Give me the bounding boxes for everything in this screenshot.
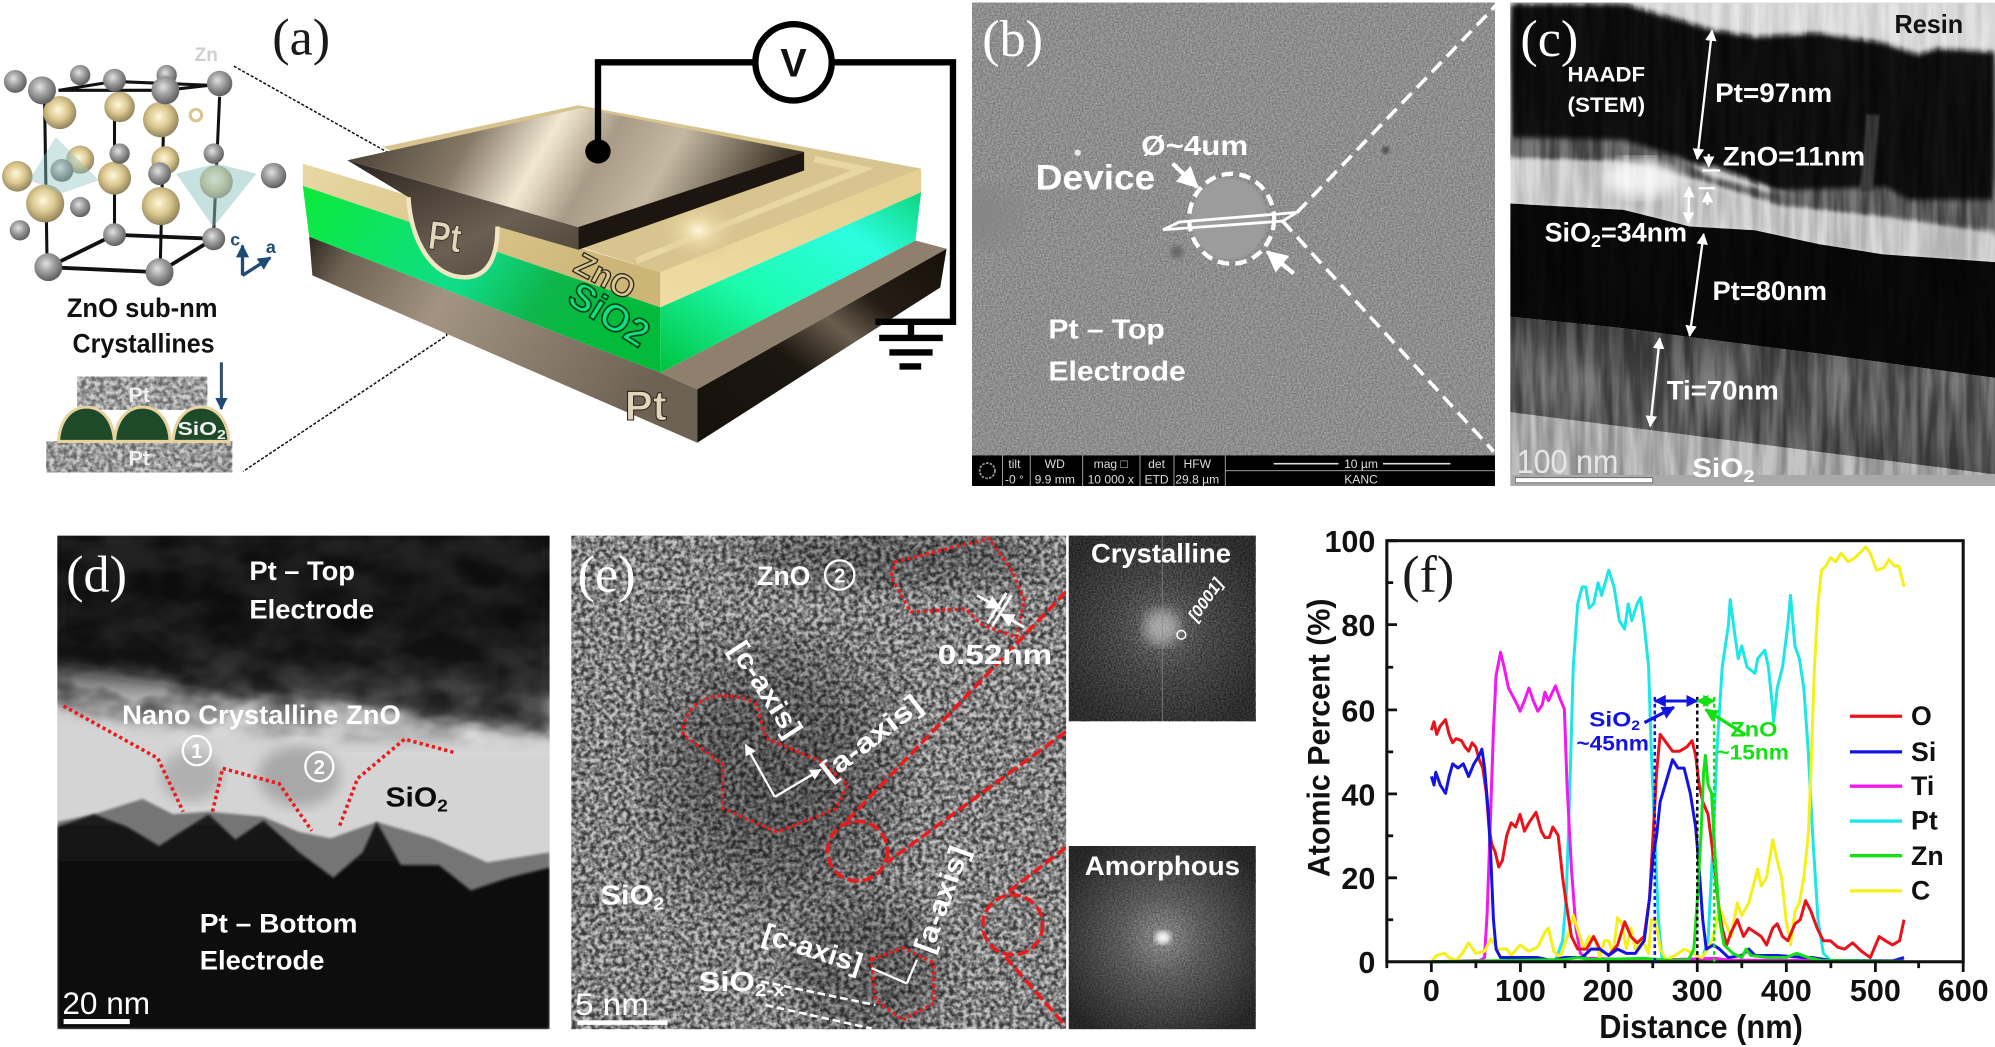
label Pt on bottom layer: Pt [625,382,667,429]
ZnO crystal structure [2,45,286,286]
SiO2 label: SiO [601,880,649,911]
caption: ZnO sub-nm Crystallines: ZnO sub-nm [67,293,218,323]
chart legend [1850,701,1944,905]
gray crystal mounds [57,799,550,1029]
thickness labels: 2 [1743,466,1755,486]
scale bar 5 nm: 5 nm [575,986,649,1022]
Pt top electrode label: Pt – Top [249,556,355,586]
chart legend: Si [1911,737,1936,767]
thickness arrows [1650,31,1720,426]
ZnO thickness annotation [1716,717,1789,764]
x axis tick labels: 200 [1583,974,1634,1008]
y axis tick labels: 100 [1324,525,1375,559]
caption: ZnO sub-nm Crystallines: Crystallines [73,328,215,358]
panel label (c): (c) [1520,11,1578,68]
SEM info bar: WD [1045,457,1065,471]
SEM info bar: -0 ° [1005,472,1024,486]
scale bar 100 nm [1515,450,1654,484]
Pt top electrode label: Pt – Top [1048,313,1165,344]
region markers 1 and 2: 2 [314,757,325,779]
crystalline grain outlines [683,538,1024,1020]
lattice spacing marker and label: 0.52nm [938,639,1052,670]
SiO2-x dashed band [762,981,875,1029]
thickness labels [1545,78,1865,486]
SEM info bar: KANC [1344,472,1378,486]
series Zn [1431,755,1904,962]
data lines [1431,547,1904,962]
thickness labels: Pt=97nm [1715,78,1832,108]
series O [1431,720,1904,958]
y axis tick labels: 20 [1341,862,1375,896]
x axis tick labels [1423,974,1989,1008]
x axis tick labels: 100 [1495,974,1546,1008]
series Pt [1431,570,1904,962]
panel label (d): (d) [66,547,127,604]
panel: (b) SEM image [942,3,1496,486]
ZnO thickness annotation: ZnO [1730,717,1777,742]
y axis tick labels [1324,525,1375,980]
SEM info bar: 10 µm [1344,457,1378,471]
x axis tick labels: 400 [1761,974,1812,1008]
HAADF STEM label [1568,67,1644,116]
panel: FFT amorphous [1069,846,1256,1029]
bottom Pt dark mass [57,814,550,1029]
Pt top electrode label [1050,320,1185,381]
panel: (d) TEM nano crystalline ZnO [57,536,550,1030]
axis labels [724,635,975,979]
thickness labels: SiO [1692,453,1738,483]
top Pt layer [1510,4,1995,235]
SiO2 thickness annotation: ~45nm [1576,731,1649,756]
x axis tick labels: 300 [1672,974,1723,1008]
y axis tick labels: 40 [1341,778,1375,812]
y axis tick labels: 0 [1358,946,1375,980]
ZnO 2 label: ZnO [757,561,810,591]
Resin label: Resin [1894,11,1963,39]
Pt top electrode label [251,562,374,619]
SiO2 light band [1510,159,1995,262]
ZnO 2 label: 2 [834,566,845,588]
SiO2-x label: SiO [699,966,747,997]
ZnO crystal structure: a [266,237,277,257]
panel label (e): (e) [578,547,636,604]
selection circles and guide lines [828,592,1066,1027]
Pt top electrode label: Electrode [1048,355,1186,386]
top electrode and transition gradient [57,536,550,752]
chart legend: C [1911,875,1930,905]
series C [1431,547,1904,962]
panel label (a): (a) [272,10,330,67]
axis labels: [a-axis] [908,842,975,957]
SiO2 label: 2 [437,796,448,816]
chart legend: Pt [1911,805,1938,835]
device dashed outline [1163,174,1297,264]
diameter label: Ø~4um [1141,130,1248,161]
top Pt electrode [347,108,804,277]
label SiO2: SiO2 [561,273,657,356]
y axis title: Atomic Percent (%) [1301,599,1337,877]
series Ti [1431,652,1904,962]
Ti layer [1510,317,1995,475]
axis labels: [c-axis] [724,635,809,743]
thickness labels: Ti=70nm [1667,375,1779,405]
HAADF STEM label: HAADF [1568,61,1645,86]
SEM info bar: 10 000 x [1088,472,1134,486]
SEM info bar: tilt [1008,457,1021,471]
circuit wiring and voltmeter: V [780,41,807,85]
SiO2 thickness annotation: 2 [1631,717,1640,733]
panel: (e) HRTEM image [571,522,1066,1037]
chart legend: Ti [1911,771,1934,801]
chart axes frame [1387,541,1963,972]
y axis tick labels: 60 [1341,694,1375,728]
thickness labels: SiO [1545,218,1591,248]
Device label: Device [1036,158,1155,198]
axis labels: [a-axis] [815,688,928,786]
inset: Pt / SiO2 / Pt stack: 2 [217,427,226,442]
SiO2 thickness annotation [1576,706,1649,756]
label ZnO: ZnO [569,245,642,307]
scale bar 20 nm: 20 nm [62,985,150,1021]
Pt top electrode label: Electrode [249,594,374,624]
SiO2 thickness annotation: SiO [1589,706,1626,731]
thickness markers [1644,696,1746,962]
circuit wiring and voltmeter [585,24,953,366]
x axis tick labels: 600 [1938,974,1989,1008]
inset: Pt / SiO2 / Pt stack: Pt [128,382,150,407]
x axis title: Distance (nm) [1599,1009,1803,1046]
SiO2 label: 2 [653,894,664,914]
SEM info bar [972,455,1495,486]
Pt bottom electrode label: Electrode [200,945,324,975]
chart legend: Zn [1911,841,1944,871]
axis labels: [c-axis] [759,918,867,979]
thickness labels: Pt=80nm [1713,276,1827,306]
inset: Pt / SiO2 / Pt stack [46,362,232,472]
panel label (f): (f) [1402,547,1454,604]
SiO2 label: SiO [386,782,434,813]
y axis tick labels: 80 [1341,609,1375,643]
x axis tick labels: 0 [1423,974,1440,1008]
panel label (b): (b) [982,11,1043,68]
inset: Pt / SiO2 / Pt stack: Pt [128,446,150,471]
amorphous label: Amorphous [1085,851,1240,881]
panel: (f) EDS line profile chart [1301,525,1989,1046]
scale bar 100 nm: 100 nm [1517,444,1618,481]
zone axis label [1177,574,1227,639]
HAADF STEM label: (STEM) [1568,92,1645,117]
inset: Pt / SiO2 / Pt stack: SiO [177,418,209,439]
thickness labels: =34nm [1601,218,1687,248]
series Si [1431,749,1904,961]
Pt bottom electrode label: Pt – Bottom [200,909,358,939]
ZnO crystal structure: c [230,230,240,250]
thickness labels: ZnO=11nm [1723,141,1865,171]
ZnO thickness annotation: ~15nm [1716,739,1789,764]
SEM info bar: 29.8 µm [1175,472,1219,486]
panel: (c) HAADF STEM cross-section [1510,3,1995,486]
dotted zoom guide lines [234,66,447,471]
nano crystalline label: Nano Crystalline ZnO [122,700,401,730]
SiO2-x label: 2-x [755,980,785,1000]
light SiO2 band [57,708,550,869]
Pt bottom electrode label [202,914,356,970]
SEM info bar: det [1148,457,1166,471]
ZnO crystal structure: Zn [195,45,218,66]
lattice spacing marker and label [938,593,1052,670]
panel: FFT crystalline [1069,536,1256,721]
caption: ZnO sub-nm Crystallines [67,293,218,358]
crystalline label: Crystalline [1091,538,1231,568]
panel: (a) device schematic [2,10,953,472]
ZnO beige layer [303,105,921,307]
SEM info bar: HFW [1183,457,1212,471]
SEM info bar: mag □ [1094,457,1129,471]
region markers 1 and 2: 1 [191,741,202,763]
x axis tick labels: 500 [1850,974,1901,1008]
ZnO boundary dotted lines [64,706,454,831]
zoom guide dashed lines [1282,5,1496,452]
bottom Pt layer [309,237,947,443]
axis arrows [746,745,917,983]
zone axis label: [0001] [1184,574,1227,626]
SEM info bar: ETD [1144,472,1169,486]
thickness labels: 2 [1591,231,1601,251]
lower Pt layer [1510,204,1995,378]
SiO2 green layer [303,186,921,373]
3D device stack [303,105,947,443]
ZnO 2 label [757,560,854,591]
SEM info bar: 9.9 mm [1035,472,1075,486]
bottom SiO2 [1510,412,1995,486]
chart legend: O [1911,701,1932,731]
region markers 1 and 2 [183,736,333,781]
label Pt in trench: Pt [426,212,465,261]
diameter arrows [1173,164,1294,274]
